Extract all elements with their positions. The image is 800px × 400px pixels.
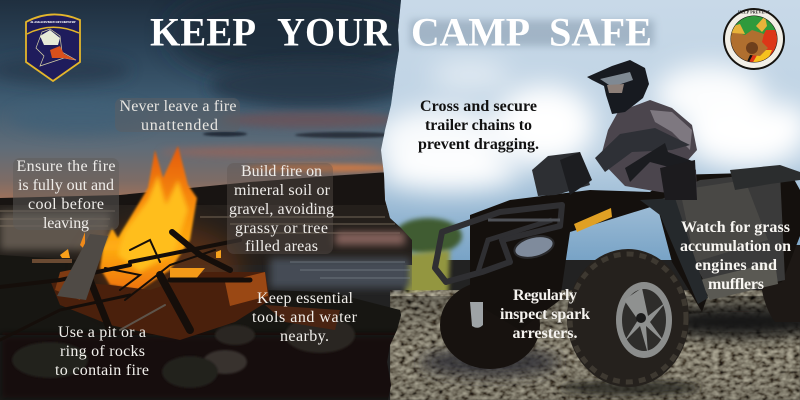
sky <box>380 0 800 260</box>
callout text: build fire: filled areas <box>245 238 318 255</box>
callout text: trailer chains: Cross and secure <box>420 98 537 115</box>
badge artwork <box>731 16 777 62</box>
callout text: grass accumulation: mufflers <box>708 276 764 293</box>
callout text: ensure the fire: is fully out and <box>18 177 114 194</box>
far hillside <box>0 172 390 215</box>
shield arc band <box>27 27 79 34</box>
title glow <box>410 20 654 46</box>
callout text: trailer chains: trailer chains to <box>425 117 532 134</box>
callout backing: build fire <box>227 163 333 254</box>
title words: YOUR <box>277 10 392 54</box>
callout text: keep essential tools: tools and water <box>252 309 358 326</box>
headlight <box>512 232 556 262</box>
gravel ground <box>390 290 800 400</box>
callout text: build fire: mineral soil or <box>234 182 331 199</box>
callout text: ensure the fire: Ensure the fire <box>16 158 116 175</box>
badge text: HELP PREVENT <box>738 10 770 14</box>
flames <box>100 146 197 290</box>
callout text: never leave a fire <box>120 98 236 134</box>
callout text: grass accumulation: Watch for grass <box>681 219 790 236</box>
callout text: build fire: Build fire on <box>241 163 322 180</box>
lake with reflections <box>0 205 420 288</box>
callout text: build fire <box>229 163 334 255</box>
callout text: use a pit: Use a pit or a <box>58 324 146 341</box>
horizon trees and grass <box>394 218 462 300</box>
title words: KEEP <box>150 10 256 54</box>
callout text: keep essential tools: nearby. <box>280 328 329 345</box>
callout backing: never leave a fire <box>115 98 240 132</box>
callout text: use a pit: ring of rocks <box>60 343 145 360</box>
embers <box>50 272 270 340</box>
glow <box>94 218 249 290</box>
callout text: never leave a fire: unattended <box>141 117 218 134</box>
title words <box>150 10 652 54</box>
sky clouds and sunset streaks <box>0 0 430 172</box>
callout text: ensure the fire <box>16 158 116 232</box>
logo: Alaska Division of Forestry shield <box>26 14 80 81</box>
panel: ATV photo (right) <box>375 0 800 400</box>
callout text: spark arresters <box>500 287 590 342</box>
tow hook <box>470 302 483 328</box>
logs and sticks <box>0 232 250 340</box>
callout text: build fire: grassy or tree <box>235 220 328 237</box>
callout text: never leave a fire: Never leave a fire <box>120 98 236 115</box>
clouds <box>375 61 800 190</box>
callout text: use a pit: to contain fire <box>55 362 149 379</box>
callout text: spark arresters: inspect spark <box>500 306 590 323</box>
reflector <box>574 208 612 232</box>
callout text: ensure the fire: leaving <box>43 215 89 232</box>
title words: SAFE <box>549 10 652 54</box>
ATV <box>435 152 800 387</box>
callout text: grass accumulation <box>680 219 791 293</box>
shield map of Alaska <box>36 29 76 66</box>
title <box>150 10 654 54</box>
dusk sky <box>0 0 420 205</box>
callout text: use a pit <box>55 324 149 379</box>
title words: CAMP <box>411 10 530 54</box>
shield text: ALASKA DIVISION OF FORESTRY <box>30 20 77 24</box>
rocks <box>12 317 355 388</box>
body and fender <box>470 172 800 330</box>
callout text: keep essential tools <box>252 290 358 345</box>
callout text: grass accumulation: accumulation on <box>680 238 791 255</box>
callout text: trailer chains <box>418 98 539 153</box>
campfire <box>0 146 340 340</box>
far front wheel <box>440 281 540 369</box>
callout text: trailer chains: prevent dragging. <box>418 136 539 153</box>
handlebar console and mirror <box>532 152 590 196</box>
logo: moose prevention badge <box>723 8 785 70</box>
callout text: spark arresters: Regularly <box>513 287 577 304</box>
callout text: spark arresters: arresters. <box>512 325 578 342</box>
front tyre <box>567 249 689 387</box>
rear wheel <box>758 245 800 322</box>
jacket <box>600 100 697 196</box>
callout text: build fire: gravel, avoiding <box>229 201 334 218</box>
rim <box>616 282 672 358</box>
bull bar <box>435 205 562 282</box>
panel: campfire photo (left) <box>0 0 430 400</box>
callout text: keep essential tools: Keep essential <box>257 290 354 307</box>
dark shore <box>0 255 420 400</box>
callout text: ensure the fire: cool before <box>28 196 104 213</box>
plank <box>57 234 108 300</box>
callout text: grass accumulation: engines and <box>695 257 777 274</box>
helmet <box>587 60 649 114</box>
callout backing: ensure the fire <box>13 158 119 230</box>
rider <box>587 60 697 200</box>
